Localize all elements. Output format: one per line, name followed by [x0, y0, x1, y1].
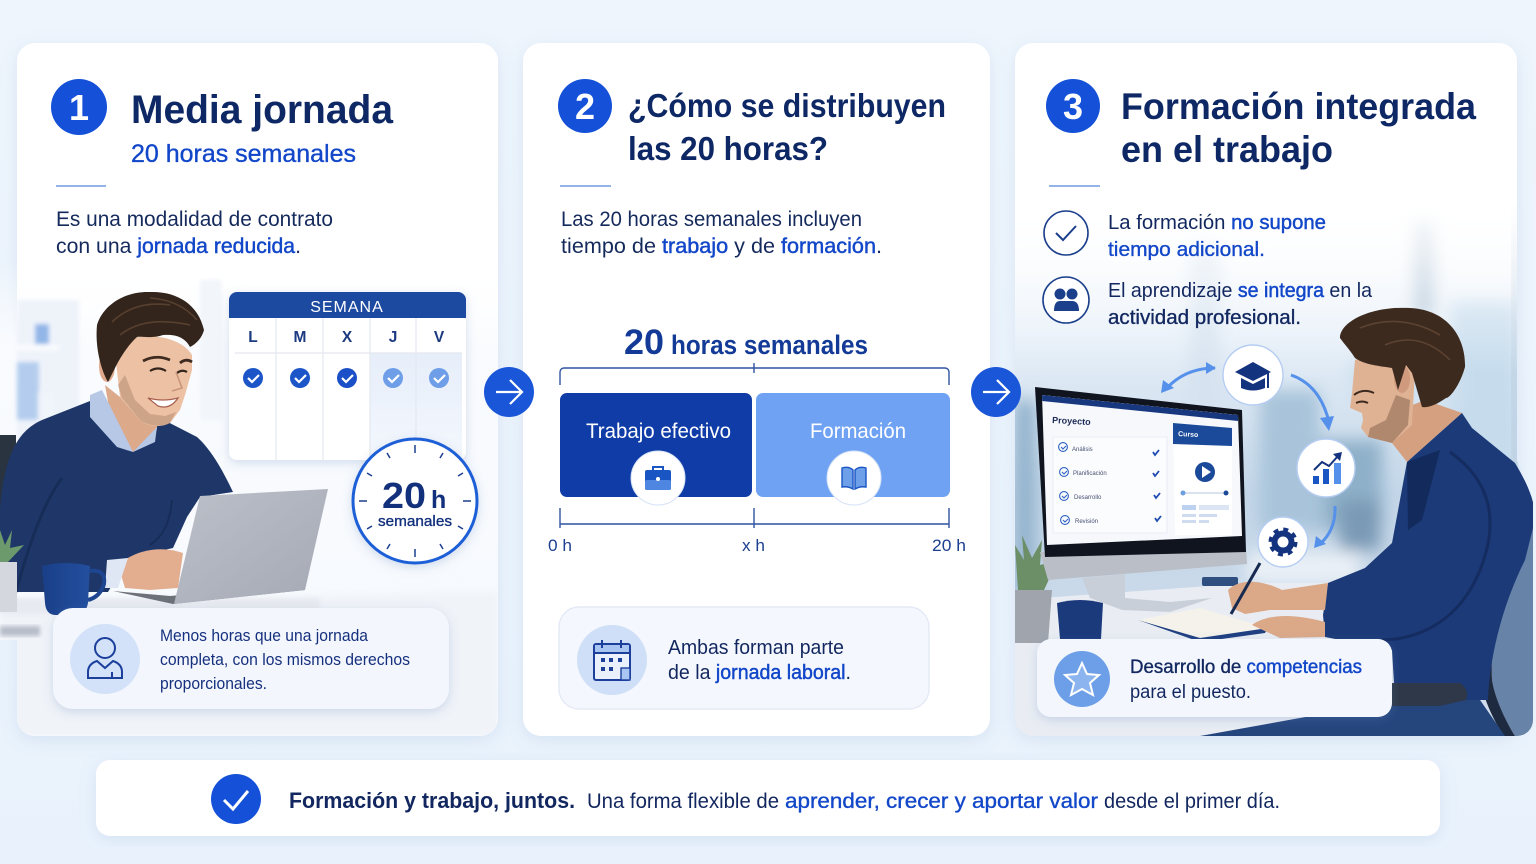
callout text: Menos horas que una jornada [160, 627, 369, 645]
screen: task list: Desarrollo [1074, 495, 1102, 501]
screen: task list: Análisis [1072, 447, 1093, 453]
heading: Media jornada: Media jornada [131, 88, 394, 132]
arrow: double [1166, 368, 1215, 389]
number badge 1 [51, 79, 107, 135]
number badge 2 [558, 79, 612, 133]
man: trousers [1200, 700, 1505, 736]
weekly calendar [229, 292, 466, 460]
man: hands and pen [1228, 563, 1328, 638]
weekday labels: M [294, 329, 306, 346]
description [561, 208, 882, 258]
banner text: Una forma flexible de [587, 790, 779, 813]
banner text: Formación y trabajo, juntos. [289, 788, 575, 813]
icon: graduation cap [1223, 345, 1283, 405]
panel 2: distribución [523, 43, 990, 736]
icon: people [1043, 277, 1089, 323]
heading: ¿Cómo se distribuyen [628, 87, 946, 124]
top bracket [560, 363, 949, 385]
notebook [1138, 608, 1266, 639]
description: tiempo de trabajo y de formación. [561, 235, 882, 258]
laptop [114, 590, 304, 604]
shirt collar [90, 390, 157, 452]
icon: open book [827, 451, 881, 505]
description [56, 208, 333, 258]
banner text: aprender, crecer y aportar valor [785, 790, 1098, 813]
callout text: Desarrollo de competencias [1130, 657, 1362, 678]
bar chart: 20 hours split [548, 363, 966, 555]
callout text: de la jornada laboral. [668, 662, 851, 684]
screen: video player [1180, 462, 1229, 523]
heading [628, 87, 946, 167]
office photo: man at desk [1015, 200, 1535, 736]
text: se integra: El aprendizaje se integra en la [1108, 279, 1373, 302]
calendar body [229, 292, 466, 460]
man: shirt [1323, 413, 1535, 700]
callout: jornada laboral [559, 607, 929, 709]
description: con una jornada reducida. [56, 235, 301, 258]
callout text [668, 637, 851, 684]
clock: 20 h semanales: 20 [382, 475, 426, 516]
plant [0, 530, 24, 612]
clock: 20 h semanales: h [431, 486, 446, 514]
screen: task list: Revisión [1075, 519, 1098, 525]
panel 1 card [17, 43, 498, 736]
icon: calendar [577, 625, 647, 695]
head [114, 336, 192, 426]
arrow: chart to gear [1320, 506, 1335, 544]
callout text: proporcionales. [160, 675, 267, 693]
eyes and brows [143, 357, 192, 363]
text: no supone tiempo adicional: La formación no supone [1108, 211, 1326, 234]
heading: en el trabajo [1121, 129, 1333, 170]
man: chair [1492, 520, 1533, 736]
sweater [0, 401, 233, 592]
text: no supone tiempo adicional [1108, 211, 1326, 261]
chart title: horas semanales [671, 330, 868, 360]
day checks [243, 368, 449, 388]
screen: Curso header label: Curso [1178, 431, 1198, 439]
text: se integra [1108, 279, 1373, 329]
number badge 3: 3 [1063, 86, 1083, 127]
callout text: Ambas forman parte [668, 637, 844, 659]
axis: x h [742, 537, 765, 555]
number badge 1: 1 [69, 87, 89, 128]
arrow: cap to chart [1291, 375, 1329, 422]
axis: 0 h [548, 537, 572, 555]
weekday labels: L [248, 329, 258, 346]
hair [97, 292, 204, 382]
blurred shelves [17, 280, 222, 440]
chart title: 20 [624, 323, 664, 362]
axis [548, 508, 966, 555]
hand and cuff [118, 549, 183, 590]
man: head [1350, 360, 1414, 443]
calendar header [229, 292, 466, 318]
chart title [624, 323, 868, 362]
mouth [148, 398, 178, 407]
bottom banner [96, 760, 1440, 836]
number badge 2: 2 [575, 86, 595, 127]
axis: 20 h [932, 537, 966, 555]
blurred office backdrop [1015, 200, 1518, 736]
nose shade [172, 372, 182, 391]
segment: trabajo efectivo [560, 393, 752, 505]
man: armrest [1392, 683, 1467, 706]
text: se integra: actividad profesional. [1108, 306, 1301, 329]
panel 3: formación integrada [1015, 43, 1535, 736]
segment: formación: Formación [810, 420, 906, 443]
banner text: desde el primer día. [1104, 790, 1280, 813]
icon: check [211, 774, 261, 824]
heading: Formación integrada [1121, 86, 1476, 127]
icon: person [70, 624, 140, 694]
banner text [289, 788, 1280, 813]
icon cycle: learning loop [1161, 345, 1355, 567]
segment: trabajo efectivo: Trabajo efectivo [586, 420, 731, 443]
weekday labels: J [389, 329, 397, 346]
man: hair [1340, 308, 1465, 407]
man: neck [1392, 400, 1462, 462]
arrow: panel 2 to panel 3 [971, 367, 1021, 417]
calendar header: SEMANA [310, 299, 384, 316]
callout text [160, 627, 410, 693]
subheading: 20 horas semanales [131, 140, 356, 168]
number badge 3 [1046, 79, 1100, 133]
callout: menos horas [53, 608, 449, 709]
desk surface [1015, 583, 1400, 736]
mug [42, 563, 104, 615]
weekday labels [248, 329, 445, 346]
weekday labels: V [434, 329, 445, 346]
segment: formación [756, 393, 950, 505]
plant [1015, 535, 1052, 643]
heading [1121, 86, 1476, 170]
icon: check [1044, 211, 1088, 255]
panel 2 card [523, 43, 990, 736]
weekday labels: X [342, 329, 353, 346]
callout text: para el puesto. [1130, 682, 1251, 703]
desk [0, 592, 498, 736]
callout text: completa, con los mismos derechos [160, 651, 410, 669]
neck [105, 385, 157, 452]
icon: star [1054, 651, 1110, 707]
heading: las 20 horas? [628, 130, 828, 167]
description: Las 20 horas semanales incluyen [561, 208, 862, 231]
mug [1057, 600, 1103, 639]
callout: competencias [1037, 639, 1392, 717]
monitor [1035, 387, 1247, 612]
panel 1: media jornada [0, 43, 498, 736]
callout text [1130, 657, 1362, 703]
clock: 20 h semanales: semanales [378, 513, 452, 530]
text: no supone tiempo adicional: tiempo adicional. [1108, 238, 1265, 261]
arrow: panel 1 to panel 2 [484, 367, 534, 417]
icon: gear [1258, 517, 1308, 567]
ear [99, 360, 115, 382]
panel 3 card [1015, 43, 1517, 736]
screen: task list [1059, 443, 1161, 525]
chair [0, 435, 16, 510]
screen: task list: Planificación [1073, 471, 1107, 477]
icon: briefcase [631, 451, 685, 505]
office photo: man at laptop [0, 262, 498, 736]
icon: growth chart [1297, 439, 1355, 497]
screen: Proyecto: Proyecto [1052, 415, 1091, 427]
description: Es una modalidad de contrato [56, 208, 333, 231]
clock: 20 h semanales [353, 439, 477, 563]
